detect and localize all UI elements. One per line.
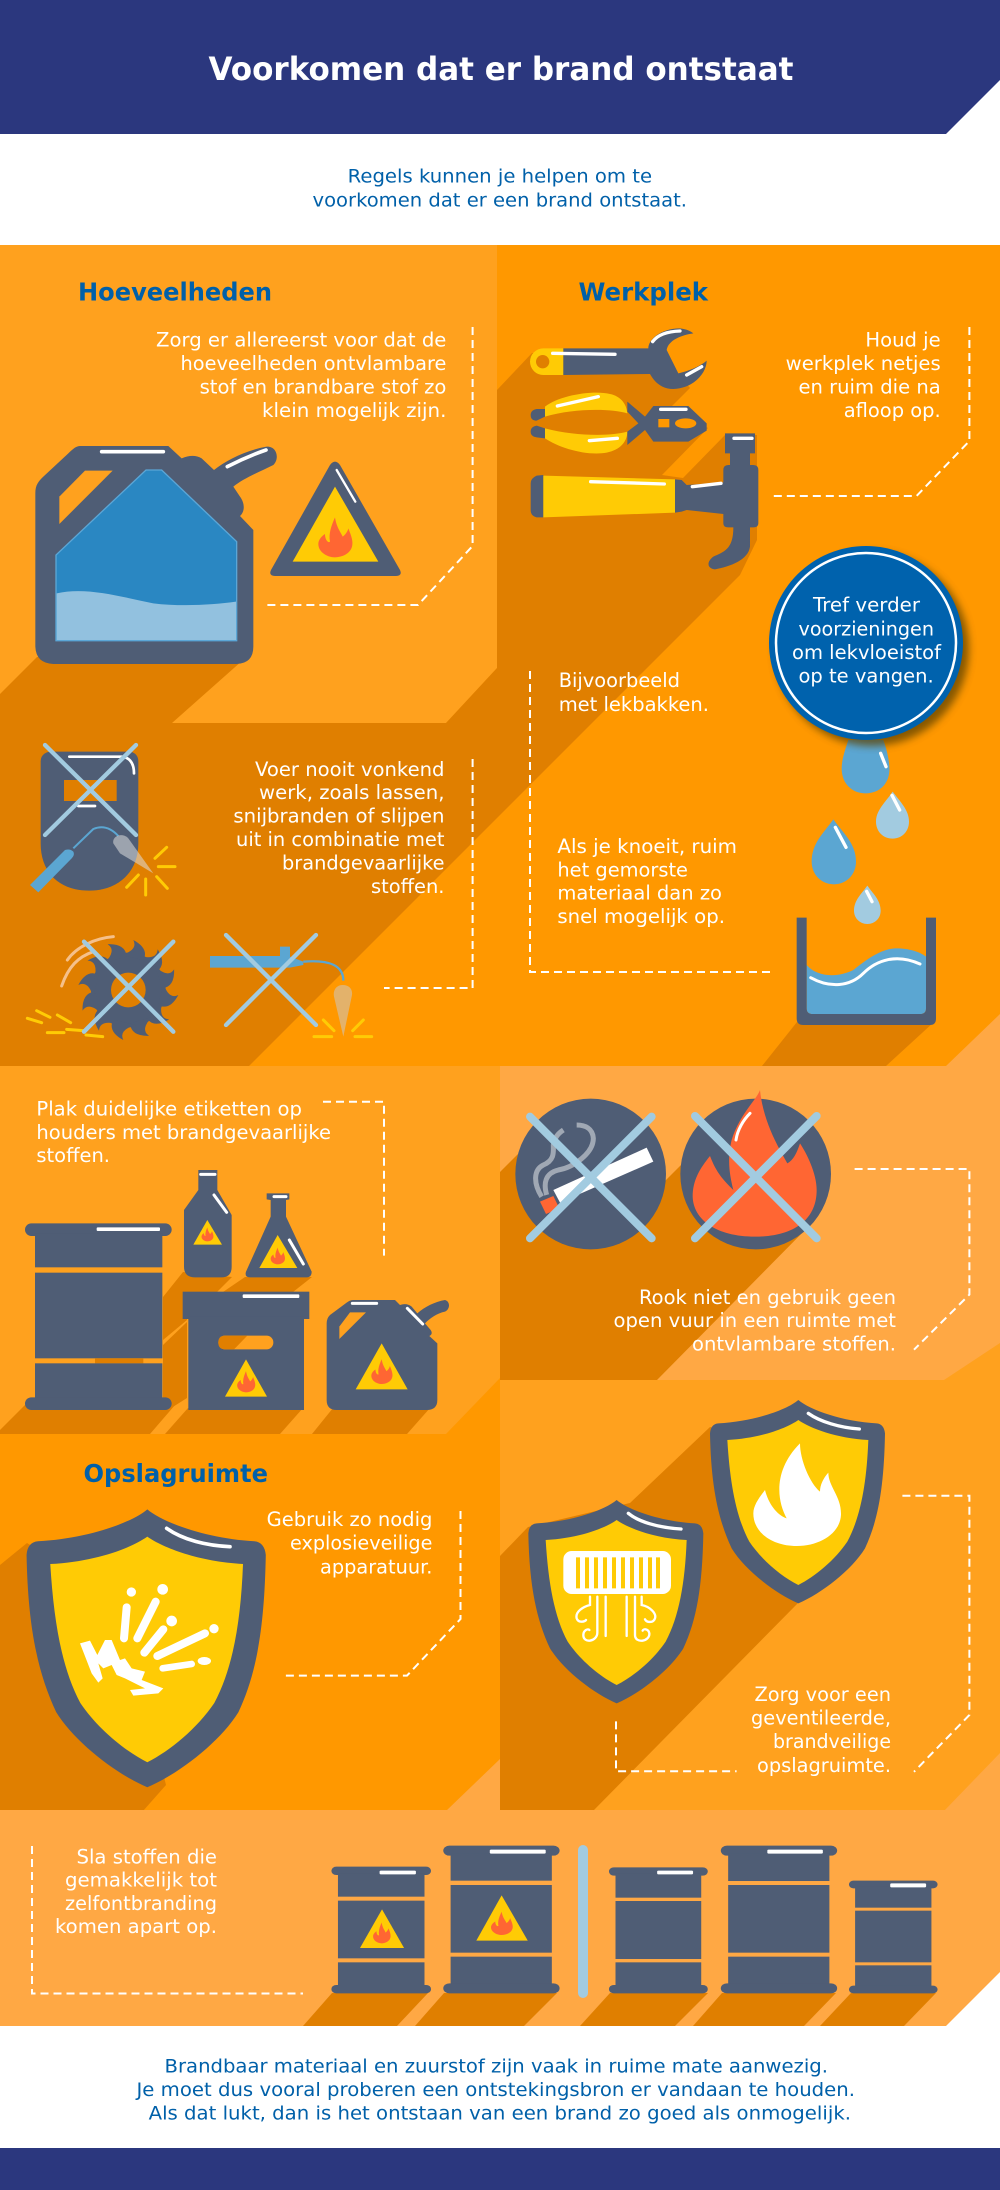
text: separate storage [55, 1846, 217, 1938]
callout text: voorzieningen [798, 617, 934, 640]
icon: bottle [184, 1170, 232, 1277]
callout text: Tref verder [812, 594, 921, 617]
text: sparking work: snijbranden of slijpen [233, 805, 444, 828]
heading: Hoeveelheden: Hoeveelheden [78, 278, 272, 307]
icon: barrels with hazard sign [331, 1846, 560, 1993]
text: sparking work: uit in combinatie met [236, 828, 445, 851]
closing text: Als dat lukt, dan is het ontstaan van een brand zo goed als onmogelijk. [149, 2102, 851, 2124]
panel: ventilated storage background [500, 1380, 1000, 1811]
text: sparking work [233, 758, 445, 898]
text: workplace: Houd je [865, 329, 941, 352]
text: spills [557, 835, 737, 928]
icon: pliers [531, 393, 707, 453]
closing text: Brandbaar materiaal en zuurstof zijn vaak in ruime mate aanwezig. [164, 2056, 828, 2078]
icon: jerrycan [35, 446, 277, 664]
text: separate storage: Sla stoffen die [76, 1846, 217, 1868]
icon: wrench [530, 328, 707, 389]
text: no smoking: ontvlambare stoffen. [692, 1333, 896, 1356]
icon: fire shield [710, 1400, 885, 1603]
text: quantities: Zorg er allereerst voor dat de [156, 329, 446, 352]
callout: circle [769, 546, 969, 746]
text: quantities [156, 329, 446, 422]
text: spills: het gemorste [557, 858, 688, 881]
text: explosion safe: Gebruik zo nodig [267, 1508, 432, 1531]
icon: flask [246, 1193, 312, 1277]
callout text [792, 594, 942, 688]
text: explosion safe: explosieveilige [290, 1532, 432, 1555]
closing text: Je moet dus vooral proberen een ontstekingsbron er vandaan te houden. [135, 2079, 855, 2101]
closing text [135, 2056, 855, 2124]
text: separate storage: komen apart op. [55, 1915, 217, 1938]
text: labels: Plak duidelijke etiketten op [36, 1098, 302, 1120]
title: Voorkomen dat er brand ontstaat [208, 50, 794, 88]
icon: ventilation shield [528, 1500, 703, 1703]
text: spills: materiaal dan zo [557, 882, 722, 905]
text: labels [36, 1098, 331, 1167]
icon: drops [812, 740, 909, 924]
text: leak trays: Bijvoorbeeld [559, 669, 680, 692]
panel: no smoking background [500, 1066, 1000, 1380]
text: separate storage: zelfontbranding [65, 1892, 217, 1915]
icon: warning triangle [270, 462, 401, 576]
text: no smoking [614, 1286, 896, 1356]
text: no smoking: Rook niet en gebruik geen [639, 1286, 896, 1309]
text: workplace: afloop op. [844, 399, 941, 422]
icon: drum [25, 1223, 172, 1410]
text: quantities: hoeveelheden ontvlambare [180, 352, 446, 375]
icon: bucket [797, 918, 936, 1025]
callout text: op te vangen. [798, 665, 934, 688]
heading: Opslagruimte: Opslagruimte [84, 1459, 268, 1488]
callout text: om lekvloeistof [792, 641, 942, 664]
dashed connectors [32, 327, 969, 1994]
text: ventilated [751, 1683, 891, 1777]
text: workplace: werkplek netjes [786, 352, 941, 375]
icon: plain barrels [609, 1846, 938, 1993]
text: ventilated: opslagruimte. [757, 1754, 891, 1777]
footer band [0, 2148, 1000, 2190]
text: labels: stoffen. [36, 1144, 110, 1167]
text: explosion safe: apparatuur. [320, 1555, 432, 1578]
icon: cutting torch crossed [210, 935, 372, 1037]
icon: welding mask crossed [30, 745, 175, 895]
text: labels: houders met brandgevaarlijke [36, 1121, 331, 1144]
text: sparking work: stoffen. [371, 875, 444, 898]
header banner [0, 0, 1000, 134]
icon: small jerrycan [327, 1300, 449, 1410]
icon: hammer [531, 433, 758, 569]
text: sparking work: brandgevaarlijke [282, 851, 444, 874]
text: ventilated: brandveilige [773, 1730, 891, 1753]
divider bar [578, 1845, 588, 1998]
text: leak trays [559, 669, 709, 716]
text: workplace [786, 329, 941, 422]
text: quantities: stof en brandbare stof zo [200, 376, 446, 398]
icon: saw blade crossed [27, 937, 180, 1042]
text: quantities: klein mogelijk zijn. [262, 399, 446, 422]
panel: separate storage background [0, 1810, 1000, 2026]
intro text [312, 166, 687, 212]
text: spills: Als je knoeit, ruim [557, 835, 737, 858]
text: ventilated: geventileerde, [751, 1706, 891, 1729]
text: sparking work: Voer nooit vonkend [255, 758, 444, 781]
icon: explosion shield [27, 1509, 266, 1787]
text: ventilated: Zorg voor een [754, 1683, 891, 1706]
intro text: voorkomen dat er een brand ontstaat. [312, 190, 687, 212]
heading: Werkplek: Werkplek [578, 278, 709, 307]
text: sparking work: werk, zoals lassen, [259, 781, 444, 804]
panel: top background [0, 245, 1000, 1066]
text: separate storage: gemakkelijk tot [65, 1869, 217, 1892]
text: spills: snel mogelijk op. [557, 905, 725, 928]
text: no smoking: open vuur in een ruimte met [614, 1309, 896, 1332]
icon: no open fire [680, 1090, 831, 1249]
panel: labels background [0, 1066, 500, 1434]
text: leak trays: met lekbakken. [559, 693, 709, 716]
intro text: Regels kunnen je helpen om te [348, 166, 652, 188]
text: explosion safe [267, 1508, 432, 1578]
icon: no smoking [515, 1099, 666, 1249]
icon: box [183, 1292, 309, 1410]
panel: storage background [0, 1434, 500, 1811]
text: workplace: en ruim die na [798, 376, 941, 398]
